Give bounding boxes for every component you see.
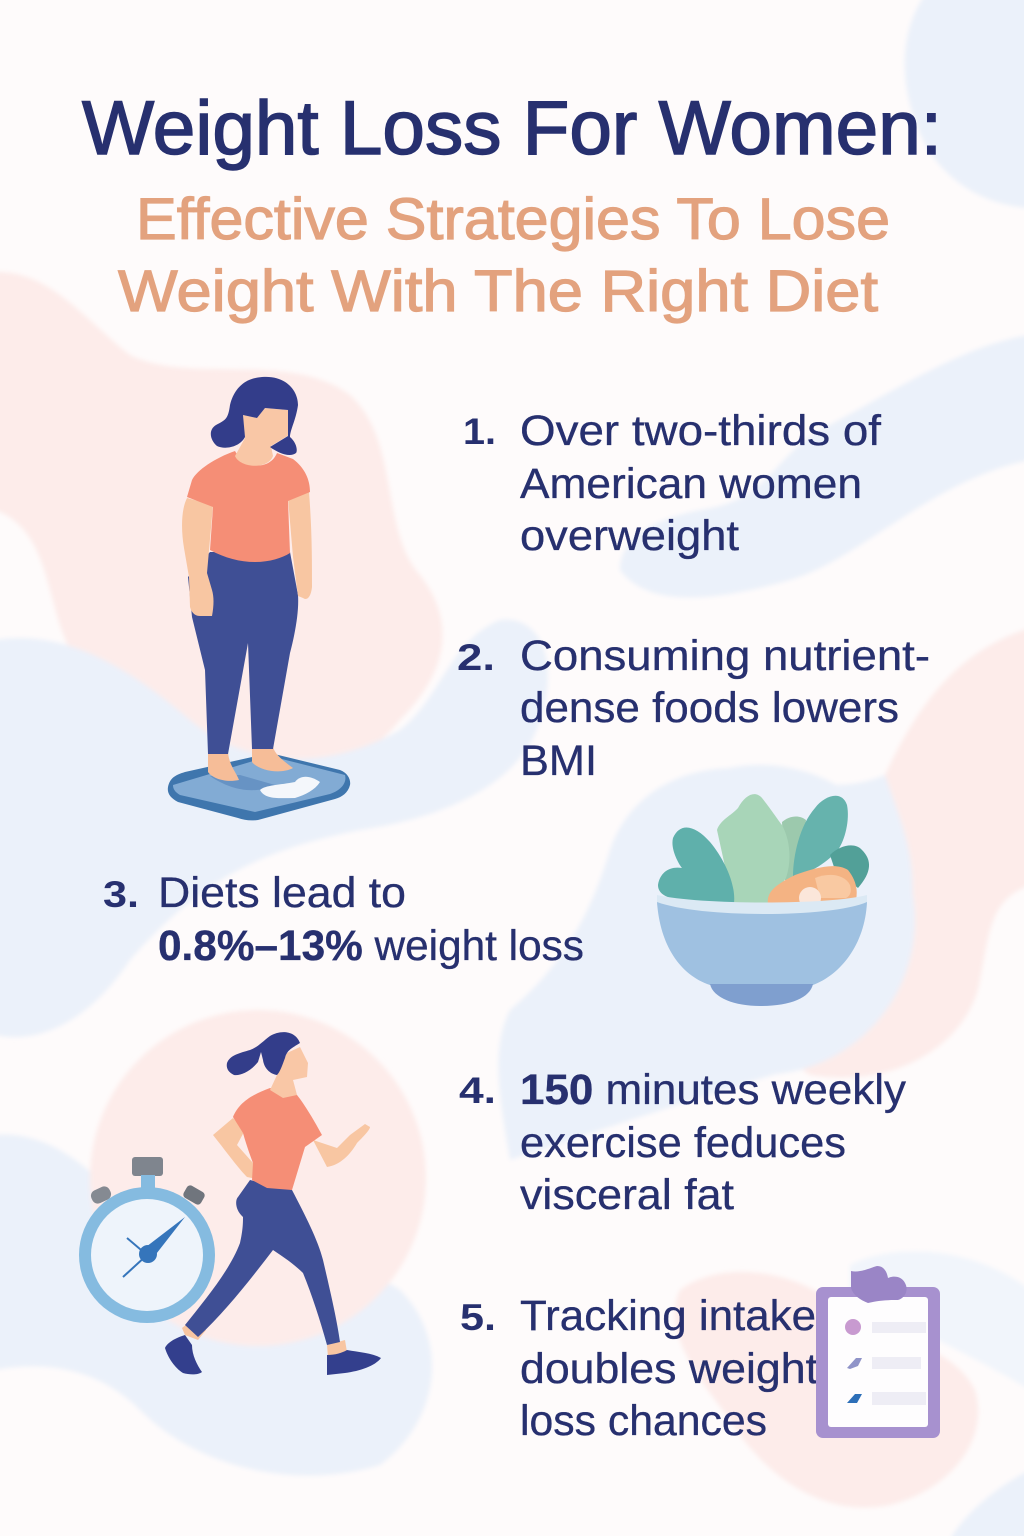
point 2: 2. <box>457 637 495 678</box>
illustration: woman walking <box>165 1032 381 1375</box>
point 1: 1. <box>463 411 496 452</box>
point 4: exercise feduces <box>520 1119 846 1167</box>
illustration: clipboard <box>816 1266 940 1438</box>
illustration: woman on scale <box>168 377 350 820</box>
point 1: Over two-thirds of <box>520 407 882 455</box>
point 2: BMI <box>520 737 597 785</box>
point 5: Tracking intake <box>520 1292 816 1340</box>
subtitle: Weight With The Right Diet <box>118 259 878 324</box>
point 5: loss chances <box>520 1397 767 1445</box>
point 5 <box>460 1292 818 1445</box>
point 3: Diets lead to <box>158 869 406 917</box>
point 4: 150 minutes weekly <box>520 1066 906 1114</box>
point 2: dense foods lowers <box>520 684 899 732</box>
title: Weight Loss For Women: <box>82 86 942 171</box>
point 3 <box>103 869 584 970</box>
subtitle <box>118 187 890 324</box>
point 3: 0.8%–13% weight loss <box>158 922 584 970</box>
point 5: 5. <box>460 1297 496 1338</box>
point 2: Consuming nutrient- <box>520 632 930 680</box>
point 4 <box>459 1066 906 1219</box>
point 5: doubles weight <box>520 1345 818 1393</box>
point 1: overweight <box>520 512 739 560</box>
point 4: visceral fat <box>520 1171 734 1219</box>
subtitle: Effective Strategies To Lose <box>136 187 890 252</box>
point 2 <box>457 632 930 785</box>
illustration: stopwatch <box>79 1157 215 1323</box>
point 4: 4. <box>459 1070 496 1111</box>
illustration: bowl of greens <box>657 794 869 1006</box>
point 3: 3. <box>103 874 139 915</box>
point 1: American women <box>520 460 862 508</box>
point 1 <box>463 407 882 560</box>
